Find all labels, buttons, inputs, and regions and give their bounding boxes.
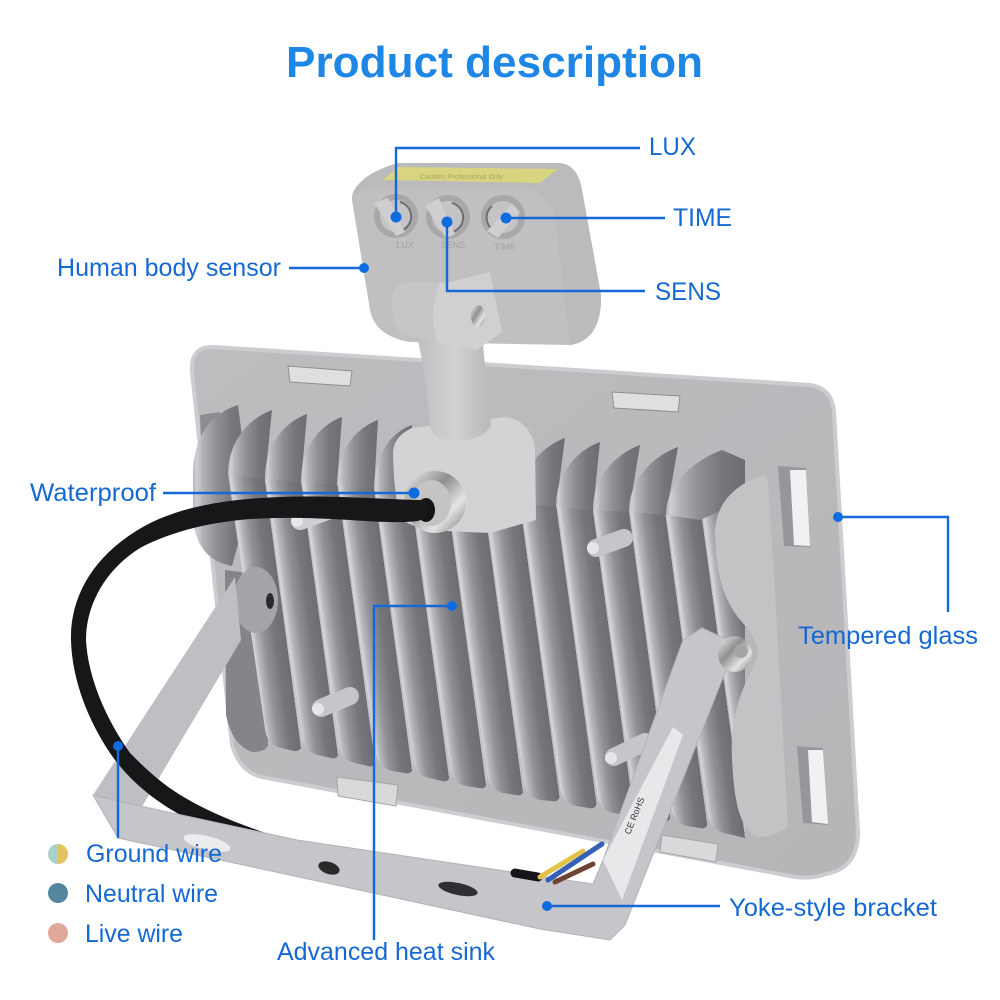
warning label [383, 167, 558, 183]
black cable [71, 497, 428, 842]
callout: SENS: SENS [655, 278, 721, 306]
bracket left arm [93, 577, 241, 810]
callout: advanced heat sink [277, 601, 495, 966]
title: Product description [286, 38, 703, 87]
callout: tempered glass [798, 512, 978, 650]
legend: neutral wire: Neutral wire [85, 880, 218, 908]
callout: human body sensor: Human body sensor [57, 254, 281, 282]
callout: waterproof: Waterproof [30, 479, 156, 507]
swivel cylinder [392, 282, 445, 343]
callout: LUX [390, 133, 696, 222]
right wing of housing [715, 475, 788, 837]
knob captions [396, 240, 516, 252]
callout: cable pointer [113, 741, 123, 838]
sensor body [352, 163, 601, 345]
flood light product [71, 163, 858, 940]
coloured wires [515, 844, 602, 882]
housing plate [192, 347, 858, 878]
sensor top bevel [352, 163, 601, 345]
callout: TIME: TIME [673, 204, 732, 232]
mounting clips [200, 366, 828, 862]
warning label: Caution: Professional Only [420, 174, 503, 181]
knob captions: LUX [396, 240, 414, 250]
knobs [374, 194, 525, 239]
motion sensor [352, 163, 601, 441]
legend: live wire: Live wire [85, 920, 183, 948]
lower neck [418, 340, 491, 441]
cable gland [404, 471, 466, 533]
silver rating label: CE RoHS [623, 796, 646, 836]
heat sink fins [193, 405, 745, 838]
callout: LUX: LUX [649, 133, 696, 161]
knob captions: TIME [494, 242, 516, 252]
legend: ground wire: Ground wire [86, 840, 222, 868]
callout: tempered glass: Tempered glass [798, 622, 978, 650]
callout: yoke-style bracket: Yoke-style bracket [729, 894, 937, 922]
callout: SENS [442, 216, 721, 306]
bracket slots [182, 830, 479, 899]
junction box [393, 417, 536, 533]
callout: TIME [500, 204, 732, 232]
swivel block [433, 272, 502, 350]
callout: yoke-style bracket [542, 894, 937, 922]
swivel screw [471, 305, 485, 327]
callout: waterproof [30, 479, 420, 507]
knob captions: SENS [441, 240, 465, 250]
bracket bolt [718, 636, 752, 672]
bottom bracket bar and right arm [93, 628, 730, 940]
callout: advanced heat sink: Advanced heat sink [277, 938, 495, 966]
silver rating label [603, 727, 683, 900]
heat sink posts [291, 510, 645, 764]
side boss with screw [234, 567, 278, 633]
rounded fin tops [228, 410, 745, 520]
